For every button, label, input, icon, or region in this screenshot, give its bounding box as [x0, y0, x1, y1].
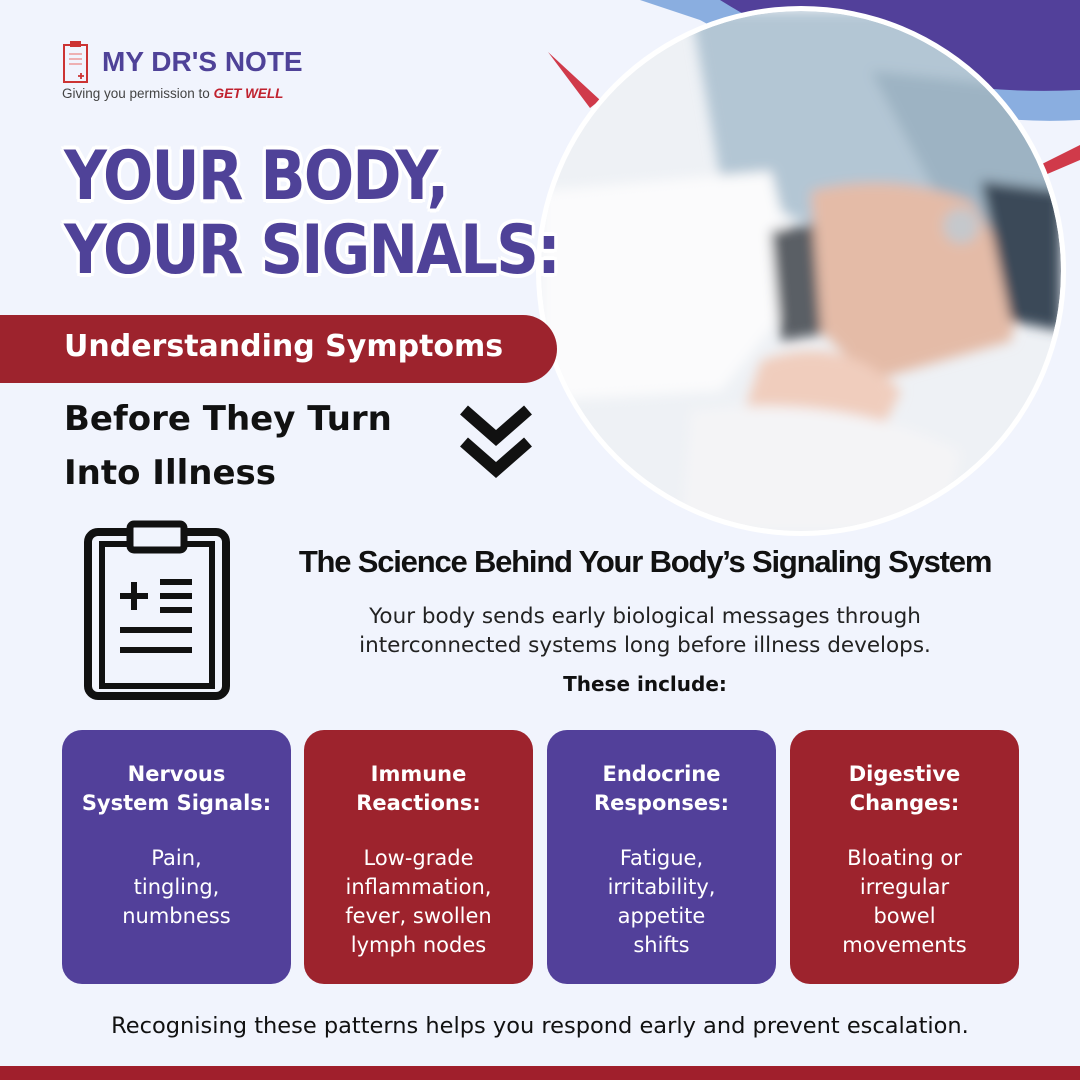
- intro text: These include:: [563, 672, 727, 696]
- card: endocrine: appetite: [618, 904, 705, 928]
- card: nervous: numbness: [122, 904, 231, 928]
- logo: [62, 41, 303, 101]
- icon: double chevron: [460, 406, 532, 478]
- subtitle text: Into Illness: [64, 453, 276, 493]
- icon: clipboard: [84, 520, 230, 700]
- card: immune: lymph nodes: [351, 933, 486, 957]
- card: digestive: Changes:: [850, 791, 959, 815]
- card: nervous: Pain,: [151, 846, 202, 870]
- subtitle text: Before They Turn: [64, 399, 392, 439]
- heading: science: The Science Behind Your Body’s Signaling System: [299, 544, 991, 579]
- card: immune: inflammation,: [346, 875, 491, 899]
- subtitle banner: Understanding Symptoms: [64, 329, 503, 364]
- card: immune: Immune: [371, 762, 466, 786]
- photo circle: [536, 6, 1066, 536]
- card: immune: fever, swollen: [345, 904, 492, 928]
- logo: MY DR'S NOTE: [102, 46, 303, 77]
- card: digestive: irregular: [860, 875, 949, 899]
- intro text: Your body sends early biological messages through: [369, 604, 921, 629]
- icon: logo clipboard: [63, 41, 88, 83]
- footer text: Recognising these patterns helps you respond early and prevent escalation.: [111, 1013, 969, 1039]
- card: endocrine: [547, 730, 776, 984]
- card: nervous: tingling,: [134, 875, 219, 899]
- card: nervous: Nervous: [128, 762, 225, 786]
- card: endocrine: shifts: [633, 933, 690, 957]
- subtitle banner: [0, 315, 557, 383]
- card: endocrine: irritability,: [608, 875, 715, 899]
- card: digestive: Bloating or: [847, 846, 962, 870]
- card: immune: Low-grade: [363, 846, 474, 870]
- card: endocrine: Responses:: [594, 791, 729, 815]
- card: nervous: [62, 730, 291, 984]
- title: YOUR SIGNALS:: [64, 211, 559, 290]
- card: immune: [304, 730, 533, 984]
- card: immune: Reactions:: [356, 791, 481, 815]
- card: nervous: System Signals:: [82, 791, 271, 815]
- title: [60, 137, 559, 290]
- card: endocrine: Endocrine: [603, 762, 720, 786]
- card: endocrine: Fatigue,: [620, 846, 703, 870]
- intro text: [359, 604, 931, 696]
- logo: Giving you permission to GET WELL: [62, 86, 283, 101]
- subtitle text: [64, 399, 392, 493]
- card: digestive: bowel: [873, 904, 936, 928]
- card: digestive: movements: [842, 933, 967, 957]
- card: digestive: Digestive: [849, 762, 960, 786]
- intro text: interconnected systems long before illness develops.: [359, 633, 931, 658]
- card: digestive: [790, 730, 1019, 984]
- title: YOUR BODY,: [64, 137, 448, 216]
